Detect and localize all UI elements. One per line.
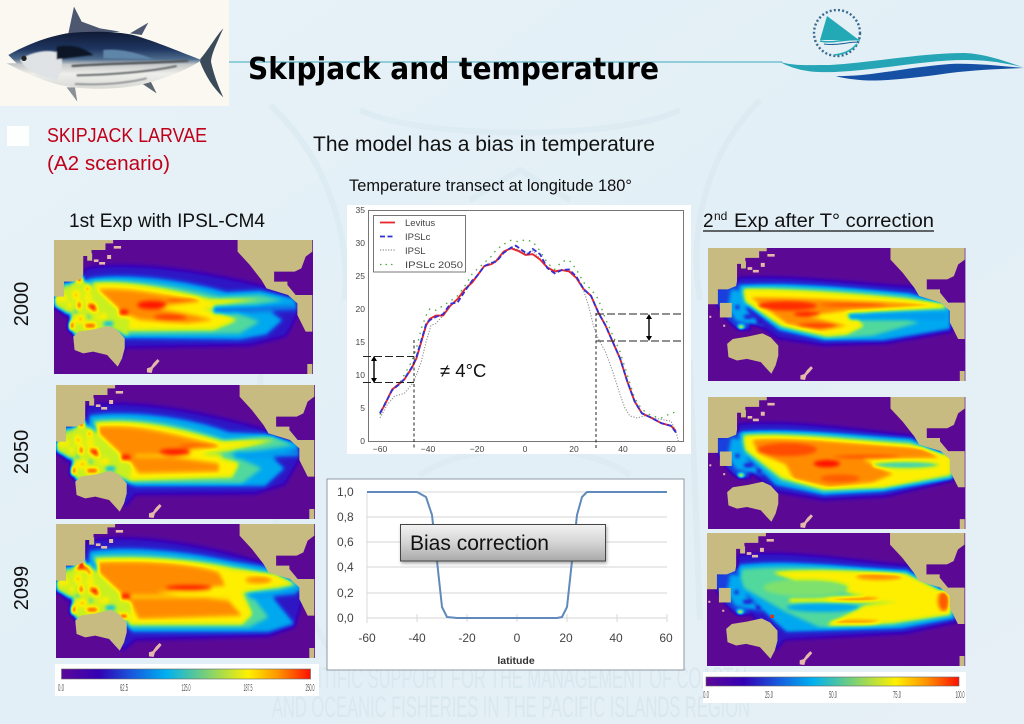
map: first experiment 2099 [56, 524, 315, 658]
map: second experiment 2099 [707, 533, 966, 666]
x axis labels: 20 [559, 631, 573, 645]
x axis labels: 0 [523, 444, 528, 454]
y axis labels: 0,6 [337, 535, 354, 549]
callout: bias correction [400, 524, 606, 561]
map: second experiment 2050 [708, 397, 966, 529]
legend [374, 216, 466, 272]
icon: logo [814, 10, 860, 56]
colorbar: second experiment: 75.0 [893, 690, 901, 701]
arrow: right bias [646, 314, 652, 341]
y axis labels: 0,4 [337, 560, 354, 574]
map: first experiment 2000 [54, 240, 313, 374]
chart: bias correction [327, 479, 684, 670]
x axis labels: -40 [408, 631, 426, 645]
x axis labels: 20 [569, 444, 579, 454]
text: 100.0 [956, 690, 965, 701]
x axis labels: −60 [373, 444, 387, 454]
annotation: 4 degrees: ≠ 4°C [440, 360, 486, 381]
arrow: left bias [371, 356, 377, 383]
colorbar: first experiment: 62.5 [120, 683, 128, 694]
year label 2000: 2000 [11, 282, 33, 326]
temperature curves [380, 240, 678, 441]
legend: IPSLc 2050 [405, 260, 463, 271]
legend: IPSLc [405, 232, 431, 243]
y axis labels: 0,0 [337, 611, 354, 625]
heading: second experiment: Exp after T° correction [734, 211, 934, 232]
x axis labels: 40 [618, 444, 628, 454]
title: Skipjack and temperature [248, 52, 659, 87]
y axis labels: 15 [356, 337, 365, 347]
y axis labels: 35 [356, 205, 365, 215]
x axis labels: 40 [609, 631, 623, 645]
x axis labels: −20 [470, 444, 484, 454]
y axis labels: 10 [356, 370, 365, 380]
y axis labels: 5 [360, 403, 365, 413]
watermark text [272, 662, 752, 724]
x axis labels: -60 [358, 631, 376, 645]
chart: temperature transect [347, 205, 691, 454]
map: second experiment 2000 [708, 248, 966, 381]
heading: first experiment: 1st Exp with IPSL-CM4 [69, 211, 265, 232]
x axis title: latitude [497, 655, 535, 667]
bias markers [363, 313, 683, 450]
colorbar: first experiment [55, 664, 319, 696]
colorbar: second experiment [703, 672, 966, 703]
y axis labels: 1,0 [337, 485, 354, 499]
x axis labels: 60 [659, 631, 673, 645]
colorbar: second experiment: 50.0 [829, 690, 837, 701]
y axis labels: 0 [360, 436, 365, 446]
x axis labels: −40 [421, 444, 435, 454]
year label 2099: 2099 [11, 566, 33, 610]
colorbar: first experiment: 250.0 [306, 683, 315, 694]
heading: skipjack larvae: (A2 scenario) [47, 153, 170, 175]
header rule and wave [229, 53, 1024, 81]
colorbar: second experiment: 0.0 [703, 690, 709, 701]
legend: Levitus [405, 218, 435, 229]
x axis labels [358, 631, 673, 645]
x axis labels: -20 [458, 631, 476, 645]
y axis labels: 0,2 [337, 586, 354, 600]
x axis labels [373, 444, 676, 454]
white square bullet [7, 126, 29, 146]
year label 2050: 2050 [11, 430, 33, 474]
text: model bias: The model has a bias in temperature [313, 133, 655, 156]
y axis labels: 30 [356, 238, 365, 248]
colorbar: first experiment: 187.5 [244, 683, 253, 694]
y axis labels: 20 [356, 304, 365, 314]
fish image panel [0, 0, 229, 106]
colorbar: first experiment: 125.0 [182, 683, 191, 694]
heading: second experiment: nd [714, 209, 727, 223]
heading: skipjack larvae: SKIPJACK LARVAE [47, 125, 207, 147]
x axis labels: 60 [666, 444, 676, 454]
y axis labels: 0,8 [337, 510, 354, 524]
heading: second experiment: 2 [703, 211, 714, 232]
heading: skipjack larvae [47, 125, 207, 175]
x axis labels: 0 [514, 631, 521, 645]
map: first experiment 2050 [56, 385, 315, 519]
y axis labels: 25 [356, 271, 365, 281]
correction curve [367, 492, 667, 618]
colorbar: second experiment: 25.0 [765, 690, 773, 701]
text: transect caption: Temperature transect at longitude 180° [349, 176, 632, 195]
legend: IPSL [405, 246, 426, 257]
colorbar: first experiment: 0.0 [58, 683, 64, 694]
y axis labels [356, 205, 365, 446]
y axis labels [337, 485, 354, 625]
callout: bias correction: Bias correction [410, 532, 549, 555]
